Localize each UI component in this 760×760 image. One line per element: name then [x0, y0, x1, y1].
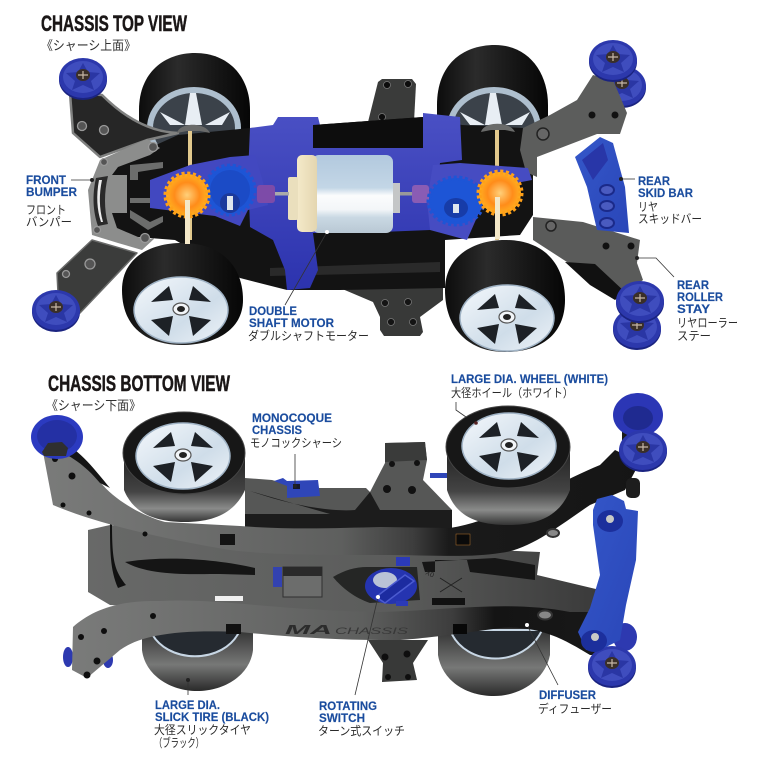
- axles: [177, 124, 515, 240]
- chassis: central black tray: [112, 117, 533, 290]
- gears and pinions: [166, 166, 521, 244]
- panel: top view car: [32, 40, 664, 352]
- title: chassis top view: [41, 11, 187, 53]
- callout: front bumper: [26, 175, 94, 229]
- callout: large dia wheel: LARGE DIA. WHEEL (WHITE): [451, 374, 608, 386]
- upper arm: [43, 442, 640, 556]
- callout: rotating switch: ターン式スイッチ: [318, 724, 405, 738]
- callout: monocoque chassis: モノコックシャーシ: [250, 436, 342, 450]
- bottom guide rollers: [31, 393, 667, 688]
- lower arm: [72, 601, 600, 678]
- callout: diffuser: DIFFUSER: [539, 690, 597, 702]
- callout: slick tire: （ブラック）: [154, 735, 204, 750]
- bottom wheels: [122, 240, 565, 352]
- callout: front bumper: バンパー: [26, 215, 72, 229]
- callout: slick tire: LARGE DIA.: [155, 700, 220, 712]
- rear rollers behind arms: [598, 66, 661, 350]
- callout: double shaft motor: [248, 230, 369, 343]
- callout: rear roller stay: [635, 256, 738, 343]
- callout: slick tire: 大径スリックタイヤ: [154, 723, 251, 737]
- callout: rear roller stay: ステー: [677, 329, 711, 343]
- callout: rear roller stay: STAY: [677, 304, 710, 316]
- chassis: top tower: [368, 79, 416, 122]
- panel: bottom view car: [31, 393, 667, 696]
- callout: monocoque chassis: MONOCOQUE: [252, 413, 332, 425]
- lower arm: CHASSIS: [335, 626, 408, 636]
- callout: rear skid bar: リヤ: [638, 200, 658, 214]
- double shaft motor: [275, 155, 412, 233]
- callout: slick tire: SLICK TIRE (BLACK): [155, 712, 269, 724]
- body centre section: X0: [424, 569, 435, 579]
- title: chassis top view: 《シャーシ上面》: [41, 38, 136, 53]
- callout: rear roller stay: ROLLER: [677, 292, 724, 304]
- callout: rear skid bar: [619, 176, 702, 226]
- lower wheels: [142, 625, 550, 696]
- wheel: front top: [139, 53, 250, 169]
- front bumper frame: [57, 93, 178, 313]
- wheel: rear top: [437, 45, 548, 169]
- callout: slick tire: [154, 678, 269, 750]
- callout: front bumper: フロント: [26, 203, 66, 217]
- callout: large dia wheel: [451, 374, 608, 425]
- callout: rear roller stay: リヤローラー: [677, 316, 738, 330]
- lower arm: MA: [285, 622, 332, 637]
- chassis: bottom tab: [340, 288, 443, 336]
- callout: monocoque chassis: [250, 413, 342, 488]
- callout: rear skid bar: SKID BAR: [638, 188, 694, 200]
- upper chassis deck: [245, 442, 452, 530]
- title: chassis bottom view: [46, 371, 230, 413]
- callout: rear skid bar: スキッドバー: [638, 212, 702, 226]
- lower frame tab: [368, 640, 428, 682]
- callout: rotating switch: SWITCH: [319, 713, 365, 725]
- guide rollers: [32, 40, 664, 332]
- rear skid bar: [575, 137, 629, 233]
- callout: double shaft motor: ダブルシャフトモーター: [248, 328, 369, 343]
- blue motor housing: [150, 113, 532, 290]
- rotating switch: [365, 557, 417, 606]
- callout: monocoque chassis: CHASSIS: [252, 425, 302, 437]
- title: chassis bottom view: CHASSIS BOTTOM VIEW: [48, 371, 230, 396]
- callout: rear skid bar: REAR: [638, 176, 671, 188]
- body centre section: [88, 522, 600, 622]
- callout: diffuser: [525, 623, 612, 716]
- blue skid bar: [578, 495, 638, 652]
- title: chassis top view: CHASSIS TOP VIEW: [41, 11, 187, 36]
- callout: diffuser: ディフューザー: [538, 701, 612, 716]
- wheel: upper right: [446, 406, 570, 525]
- bottom-side hidden rollers: [63, 623, 637, 668]
- callout: rotating switch: [318, 595, 405, 738]
- callout: double shaft motor: DOUBLE: [249, 306, 297, 318]
- rear roller stay and top arm: [520, 75, 643, 300]
- callout: front bumper: BUMPER: [26, 187, 78, 199]
- callout: large dia wheel: 大径ホイール（ホワイト）: [451, 386, 573, 400]
- callout: rear roller stay: REAR: [677, 280, 710, 292]
- callout: rotating switch: ROTATING: [319, 701, 377, 713]
- title: chassis bottom view: 《シャーシ下面》: [46, 398, 141, 413]
- callout: front bumper: FRONT: [26, 175, 66, 187]
- callout: double shaft motor: SHAFT MOTOR: [249, 318, 335, 330]
- wheel: upper left: [123, 412, 245, 522]
